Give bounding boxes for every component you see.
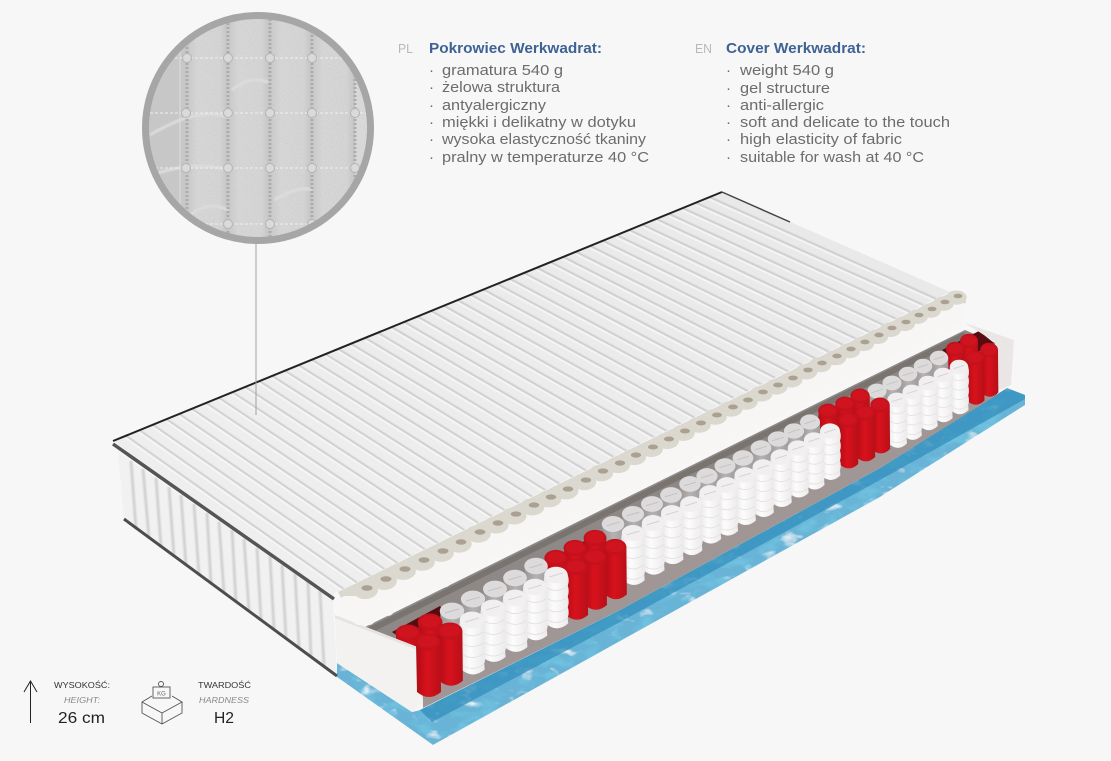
hardness spec: HARDNESS: [199, 695, 249, 705]
icon: height arrow: [24, 681, 37, 723]
English feature list: ·: [726, 131, 731, 148]
English feature list: ·: [726, 80, 731, 97]
English feature list: gel structure: [740, 80, 830, 97]
Polish feature list: ·: [429, 131, 434, 148]
English feature list: high elasticity of fabric: [740, 131, 903, 148]
English feature list: [726, 62, 950, 166]
Polish specification text: [398, 40, 649, 166]
hardness spec: [198, 679, 251, 727]
icon: hardness box with weight: KG: [157, 692, 166, 698]
Polish feature list: ·: [429, 149, 434, 166]
English heading: Cover Werkwadrat:: [726, 40, 866, 57]
Polish heading: Pokrowiec Werkwadrat:: [429, 40, 602, 57]
Polish feature list: miękki i delikatny w dotyku: [442, 114, 636, 131]
Polish feature list: antyalergiczny: [442, 97, 547, 114]
Polish feature list: ·: [429, 97, 434, 114]
spring cavity back wall: [363, 330, 1000, 655]
left end foam block: [335, 615, 423, 712]
English specification text: [695, 40, 950, 166]
English feature list: weight 540 g: [739, 62, 834, 79]
English feature list: ·: [726, 149, 731, 166]
mattress illustration: [113, 192, 1025, 745]
English feature list: ·: [726, 97, 731, 114]
Polish feature list: ·: [429, 79, 434, 96]
Polish feature list: [429, 62, 649, 166]
English feature list: ·: [726, 62, 731, 79]
icon: hardness box with weight: [142, 682, 182, 724]
quilted cover top: [113, 192, 950, 599]
latex foam layer with holes: [338, 290, 967, 625]
pocket springs front row: [416, 343, 998, 697]
Polish feature list: gramatura 540 g: [442, 62, 563, 79]
language tag EN: EN: [695, 41, 712, 56]
right end foam block: [965, 323, 1014, 392]
mattress side panel: [118, 452, 337, 676]
height spec: 26 cm: [58, 710, 105, 727]
English feature list: suitable for wash at 40 °C: [740, 149, 924, 166]
English feature list: soft and delicate to the touch: [740, 114, 950, 131]
magnified fabric detail circle: [145, 15, 371, 241]
Polish feature list: ·: [429, 62, 434, 79]
Polish feature list: ·: [429, 114, 434, 131]
pocket springs back row: [396, 334, 978, 688]
Polish feature list: pralny w temperaturze 40 °C: [442, 149, 649, 166]
leader line: [255, 240, 257, 415]
hardness spec: H2: [214, 710, 234, 727]
height spec: [54, 679, 110, 727]
English feature list: ·: [726, 114, 731, 131]
height spec: HEIGHT:: [64, 695, 101, 705]
hardness spec: TWARDOŚĆ: [198, 679, 251, 690]
felt layer: [420, 340, 1000, 708]
Polish feature list: wysoka elastyczność tkaniny: [441, 131, 647, 148]
language tag PL: PL: [398, 41, 413, 56]
English feature list: anti-allergic: [740, 97, 825, 114]
height spec: WYSOKOŚĆ:: [54, 679, 110, 690]
blue gel foam base: [337, 388, 1025, 745]
Polish feature list: żelowa struktura: [442, 79, 561, 96]
